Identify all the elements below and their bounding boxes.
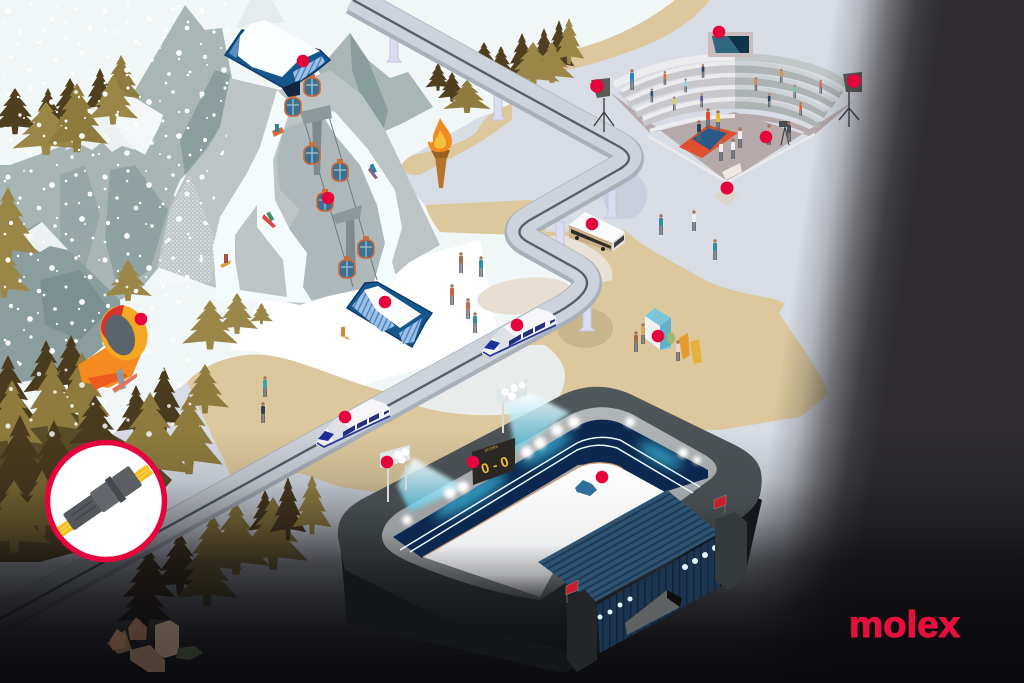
stadium: ice rink bbox=[423, 462, 665, 597]
lift station: top bbox=[225, 20, 330, 97]
connector body bbox=[60, 464, 144, 534]
pale patch by the train bbox=[475, 273, 575, 319]
stadium: scoreboard: SCORE bbox=[484, 444, 499, 453]
people on the plaza bbox=[659, 210, 717, 260]
dark fade: bottom bbox=[0, 430, 1024, 683]
amphitheatre: big screen bbox=[708, 32, 753, 57]
stadium: left tower bbox=[567, 590, 597, 672]
stadium: outer walls bbox=[340, 430, 762, 673]
snow cap: lower peak bbox=[15, 222, 68, 252]
elevated rail line bbox=[0, 0, 629, 619]
trees: upper right forest bbox=[425, 18, 584, 113]
ski lift cables and pylons bbox=[300, 105, 377, 287]
forest undergrowth bbox=[0, 405, 172, 562]
rail shadow on the sand bbox=[557, 308, 613, 348]
skiers on slope bbox=[220, 124, 378, 340]
red markers bbox=[135, 26, 861, 483]
train: lower bbox=[316, 399, 390, 448]
stadium: seating band bbox=[393, 420, 708, 558]
rail pillars bbox=[387, 36, 619, 331]
mountain: central ski slope bbox=[157, 70, 440, 305]
mountain: inner darker face bbox=[277, 110, 385, 300]
amphitheatre: seating rows, right bbox=[735, 57, 848, 133]
bus bbox=[569, 212, 625, 252]
speaker: left bbox=[591, 78, 614, 132]
stadium: scoreboard bbox=[472, 438, 515, 485]
camera rig bbox=[713, 163, 742, 206]
sand area: lower plain bbox=[187, 200, 828, 492]
podium with athletes bbox=[679, 108, 738, 158]
snow speckle bbox=[156, 176, 215, 284]
stadium: band glow bbox=[429, 425, 685, 525]
amphitheatre: plaza frame bbox=[648, 134, 815, 182]
sand path: winding by torch bbox=[401, 103, 512, 175]
stadium: entrance roof bbox=[538, 490, 720, 603]
gondola cabins bbox=[285, 74, 374, 278]
stadium: band light lines bbox=[400, 437, 700, 552]
stadium: ice machine bbox=[575, 480, 597, 496]
stadium: gate shadow bbox=[667, 590, 682, 607]
snowfall bbox=[5, 4, 234, 366]
snow patch on ridge bbox=[108, 95, 163, 155]
trees: lower left forest bbox=[0, 335, 229, 553]
stadium: flag left bbox=[566, 580, 578, 603]
train: upper bbox=[482, 308, 556, 357]
trees: below the rail bbox=[117, 475, 332, 628]
stadium: gate opening bbox=[625, 590, 682, 635]
village bbox=[107, 617, 203, 672]
pale peak behind the lift station bbox=[236, 0, 285, 28]
officials bbox=[719, 127, 742, 161]
stadium: rink edge bbox=[423, 463, 622, 557]
fine snowfall bbox=[4, 5, 240, 402]
trees: left edge bbox=[0, 187, 152, 301]
stadium: right tower bbox=[715, 512, 747, 590]
audience bbox=[630, 64, 822, 116]
stadium: scoreboard: 0 - 0 bbox=[479, 453, 511, 477]
people on the snow bbox=[261, 252, 483, 423]
speaker: right bbox=[839, 72, 862, 127]
stadium: inner ring bbox=[382, 407, 717, 600]
background: snow shading bbox=[230, 240, 500, 395]
connector callout bbox=[40, 442, 164, 560]
stadium: floodlight beams bbox=[507, 393, 570, 452]
stadium: entrance wall bbox=[597, 535, 720, 653]
mountain: right peak bbox=[318, 33, 433, 132]
logo: molex bbox=[849, 604, 960, 645]
amphitheatre: floor wedge bbox=[610, 92, 855, 182]
pale snow patch under the rail bbox=[415, 345, 565, 415]
vending area bbox=[634, 308, 702, 364]
lift station: bottom bbox=[347, 282, 432, 347]
trees: by the slope bbox=[182, 293, 273, 350]
ski run: left bbox=[213, 90, 313, 303]
stadium bbox=[338, 380, 762, 673]
torch bbox=[428, 118, 452, 188]
pale patch by the bus bbox=[540, 235, 612, 285]
stadium: entrance lights bbox=[598, 545, 718, 620]
camera crew bbox=[767, 121, 791, 145]
ski run: grey island bbox=[235, 205, 287, 297]
stadium: crowd lights bbox=[402, 416, 701, 525]
background: snowfield bbox=[0, 0, 675, 490]
stadium: floodlight left bbox=[380, 445, 410, 502]
stadium: flag right bbox=[714, 495, 726, 513]
ski run: right bbox=[318, 108, 402, 285]
mountains: far left range bbox=[0, 5, 232, 385]
yellow cables bbox=[56, 464, 154, 537]
trees: top left forest bbox=[0, 55, 142, 155]
amphitheatre: seating rows, left bbox=[614, 57, 735, 131]
snow flakes on lower forest bbox=[0, 330, 200, 440]
snow cap: left peak bbox=[65, 103, 135, 152]
sand path: upper right bbox=[530, 0, 710, 72]
snowcat vehicle bbox=[78, 299, 155, 393]
stadium: floodlight right bbox=[497, 380, 527, 433]
rail shadow on the plaza bbox=[603, 171, 647, 219]
stadium: roof ring bbox=[338, 387, 762, 650]
